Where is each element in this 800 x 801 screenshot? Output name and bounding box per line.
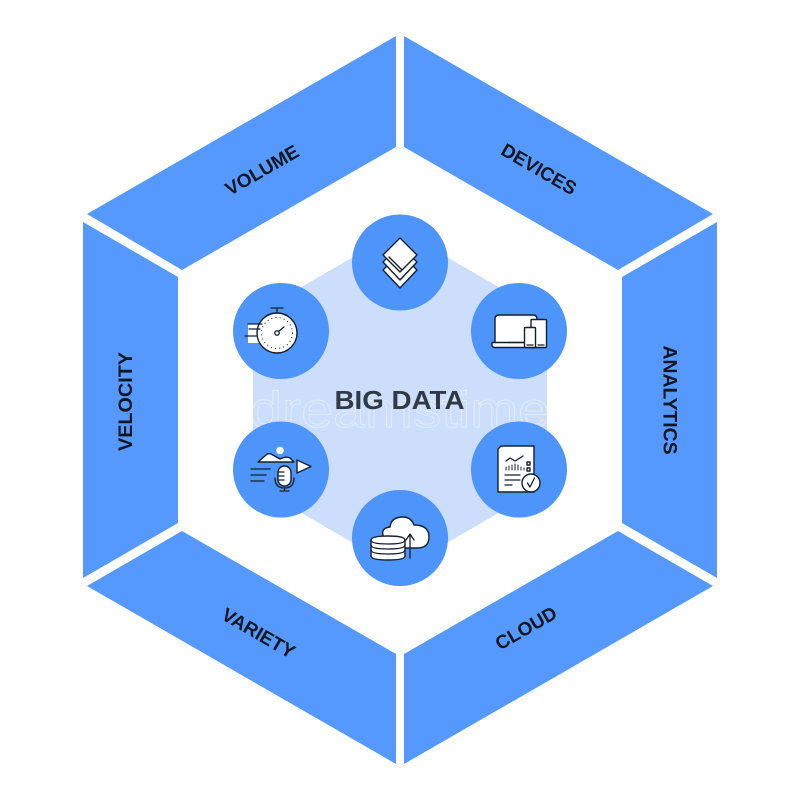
icon circle: report bbox=[471, 422, 567, 518]
segment: variety: VARIETY bbox=[218, 605, 299, 663]
segment: analytics: ANALYTICS bbox=[658, 346, 680, 454]
icon circle: cloud and database bbox=[352, 490, 448, 586]
watermark: dreamstime bbox=[250, 382, 550, 438]
central hexagon bbox=[253, 230, 547, 570]
icon circle: layers bbox=[352, 214, 448, 310]
icon circle: devices bbox=[471, 283, 567, 379]
title: BIG DATA bbox=[334, 385, 465, 415]
icon circle: variety media bbox=[233, 422, 329, 518]
segment: cloud bbox=[404, 531, 713, 764]
segment: velocity bbox=[83, 222, 178, 578]
segment: cloud: CLOUD bbox=[492, 603, 561, 655]
segment: devices: DEVICES bbox=[497, 140, 580, 200]
segment: analytics bbox=[622, 222, 717, 578]
segment: volume: VOLUME bbox=[222, 142, 303, 200]
segment: devices bbox=[404, 36, 713, 270]
icon circle: stopwatch bbox=[233, 283, 329, 379]
segment: variety bbox=[87, 531, 396, 764]
segment: velocity: VELOCITY bbox=[116, 352, 137, 451]
segment: volume bbox=[87, 36, 396, 270]
